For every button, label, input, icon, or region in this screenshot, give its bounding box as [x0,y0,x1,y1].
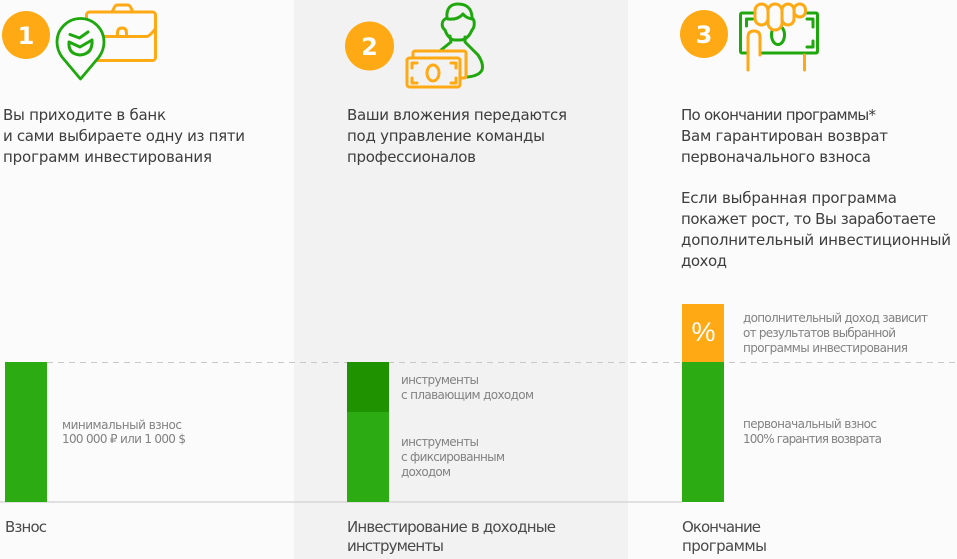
step 2 text: Ваши вложения передаются [347,106,567,124]
step 1 text: и сами выбираете одну из пяти [3,127,245,145]
label: initial deposit [743,417,882,446]
step 3 text: первоначального взноса [681,148,871,166]
step 1 text: Вы приходите в банк [3,106,166,124]
icon: briefcase and map pin [57,5,156,79]
step 3 text: Если выбранная программа [681,189,897,207]
step 1 text: программ инвестирования [3,148,212,166]
label: additional income: дополнительный доход зависит [743,311,928,325]
step 2 text: профессионалов [347,148,476,166]
step 1 text [3,106,245,166]
label: fixed income: инструменты [401,435,479,449]
axis label: end of programme [682,518,767,555]
axis label: end of programme: программы [682,537,767,555]
step 2 text [347,106,567,166]
axis label: investing [347,518,556,555]
step 1 badge [2,11,50,59]
label: floating income: инструменты [401,373,479,387]
axis label: investing: Инвестирование в доходные [347,518,556,536]
step 3 text: Вам гарантирован возврат [681,127,888,145]
panel: middle column background [294,0,628,559]
step 3 text: дополнительный инвестиционный [681,231,951,249]
label: additional income [743,311,928,355]
axis label: end of programme: Окончание [682,518,761,536]
icon: hand holding banknote [740,4,818,70]
label: fixed income: с фиксированным [401,450,505,464]
label: minimum deposit: минимальный взнос [62,418,182,432]
bar: end of programme: % [691,317,716,347]
step 3 text: покажет рост, то Вы заработаете [681,210,936,228]
step 2 badge: 2 [361,33,378,61]
label: fixed income [401,435,505,479]
icon: person with banknotes [407,4,482,87]
label: floating income [401,373,534,402]
step 3 text [681,106,951,270]
label: additional income: от результатов выбранной [743,326,896,340]
label: floating income: с плавающим доходом [401,388,534,402]
bar: minimum deposit [5,362,47,502]
axis label: investing: инструменты [347,537,444,555]
label: minimum deposit [62,418,186,446]
label: initial deposit: 100% гарантия возврата [743,432,882,446]
axis label: deposit: Взнос [5,518,47,536]
bar: investment instruments [347,362,389,502]
bar: end of programme [682,304,724,502]
step 2 text: под управление команды [347,127,545,145]
step 3 text: По окончании программы* [681,106,876,124]
step 3 badge [680,10,728,58]
step 1 badge: 1 [18,22,34,50]
step 3 text: доход [681,252,727,270]
label: fixed income: доходом [401,465,451,479]
label: minimum deposit: 100 000 ₽ или 1 000 $ [62,432,186,446]
label: additional income: программы инвестирования [743,341,908,355]
label: initial deposit: первоначальный взнос [743,417,877,431]
step 3 badge: 3 [696,21,712,49]
step 2 badge [345,22,394,70]
